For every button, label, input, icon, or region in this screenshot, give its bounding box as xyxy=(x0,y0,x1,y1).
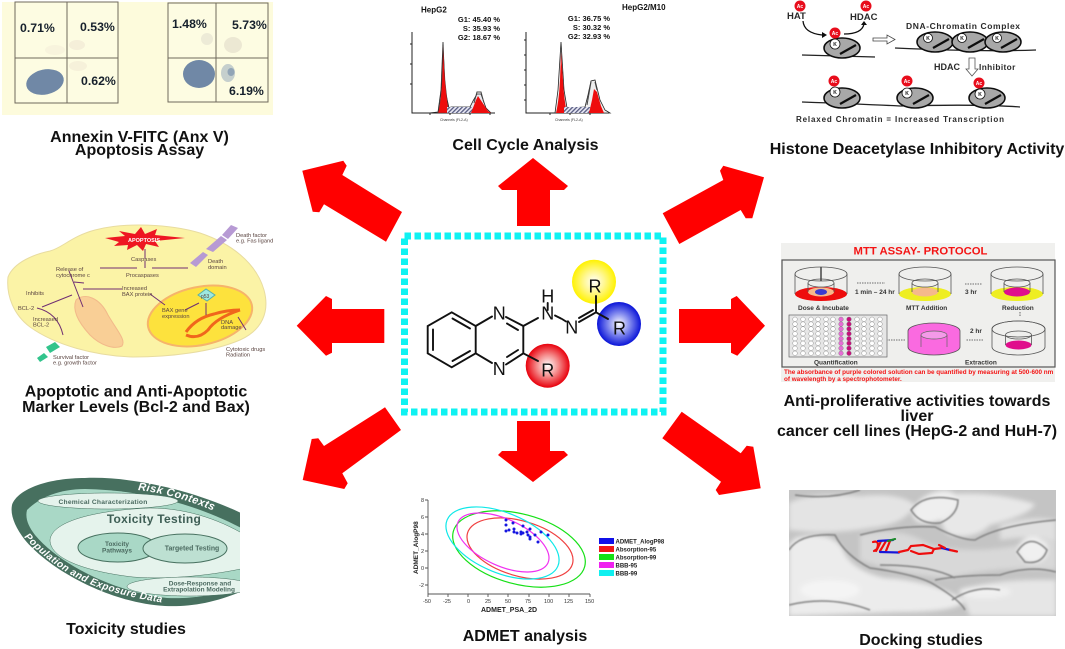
sample labels: HepG2 xyxy=(421,6,447,14)
legend: Absorption-99 xyxy=(616,556,657,562)
Ac and K marks: K xyxy=(833,42,837,48)
step labels: 1 min – 24 hr xyxy=(855,289,895,296)
step labels: Reduction xyxy=(1002,305,1034,312)
step labels: Quantification xyxy=(814,360,858,366)
chromatin diagram xyxy=(794,0,1036,108)
legend: ADMET_AlogP98 xyxy=(616,540,665,546)
substituent circle: blue xyxy=(597,302,641,346)
quadrant percentages xyxy=(20,17,267,98)
panel: MTT assay xyxy=(777,243,1057,440)
quadrant percentages: 0.53% xyxy=(80,20,115,34)
axis ticks: 150 xyxy=(585,599,594,605)
channel axis labels: Channels (FL2-A) xyxy=(440,118,468,122)
pathway labels: Increased xyxy=(122,286,147,292)
heading: cell cycle: Cell Cycle Analysis xyxy=(452,137,599,154)
diagram labels xyxy=(787,11,1021,124)
heading: Annexin: Annexin V-FITC (Anx V) xyxy=(50,129,229,146)
cycle percentages: S: 35.93 % xyxy=(463,24,500,33)
axis ticks: 75 xyxy=(525,599,531,605)
cycle percentages: G2: 32.93 % xyxy=(568,32,610,41)
cycle percentages xyxy=(458,14,610,42)
axis ticks: 2 xyxy=(421,549,424,555)
protocol title: MTT ASSAY- PROTOCOL xyxy=(854,246,988,258)
docked ligand xyxy=(873,539,957,554)
axis ticks: -50 xyxy=(423,599,431,605)
heading: histone: Histone Deacetylase Inhibitory Activity xyxy=(770,141,1064,158)
quadrant percentages: 5.73% xyxy=(232,18,267,32)
Ac and K marks: K xyxy=(905,91,909,97)
biplot xyxy=(425,492,594,600)
axis ticks: 125 xyxy=(564,599,573,605)
diagram labels: HDAC xyxy=(850,12,878,23)
pathway labels: BAX gene xyxy=(162,308,188,314)
atom labels: R xyxy=(613,318,626,338)
protocol diagram xyxy=(782,260,1055,367)
protein surface xyxy=(789,484,1056,616)
panel: Annexin V apoptosis assay xyxy=(2,2,273,159)
diagram labels: HAT xyxy=(787,11,806,22)
cycle percentages: G1: 36.75 % xyxy=(568,14,610,23)
pathway labels: Increased xyxy=(33,317,58,323)
atom labels: H xyxy=(541,286,554,306)
red arrow: bottom right xyxy=(662,412,761,495)
Ac and K marks: K xyxy=(926,36,930,42)
pathway labels: Inhibits xyxy=(26,291,44,297)
panel: apoptotic markers xyxy=(8,225,273,416)
atom labels: N xyxy=(493,304,506,324)
pathway labels: BCL-2 xyxy=(18,306,34,312)
axis ticks: 8 xyxy=(421,498,424,504)
axis ticks: -25 xyxy=(443,599,451,605)
heading: ADMET: ADMET analysis xyxy=(463,628,587,645)
pathway labels: Death factor xyxy=(236,233,267,239)
atom labels: N xyxy=(565,318,578,338)
Ac and K marks: Ac xyxy=(904,79,910,85)
atom labels xyxy=(493,276,626,380)
heading: apoptotic markers: Apoptotic and Anti-Apoptotic xyxy=(25,384,247,400)
Ac and K marks xyxy=(797,4,999,98)
atom labels: R xyxy=(588,276,602,296)
diagram labels: DNA-Chromatin Complex xyxy=(906,21,1021,31)
step labels: 3 hr xyxy=(965,289,977,296)
pathway labels: expression xyxy=(162,314,190,320)
axis labels xyxy=(413,521,537,614)
quadrant percentages: 0.62% xyxy=(81,74,116,88)
sample labels: HepG2/M10 xyxy=(622,3,666,12)
ellipse labels: Toxicity xyxy=(105,541,129,548)
curved ring labels: Risk Contexts xyxy=(138,482,214,510)
red arrow: right xyxy=(679,296,765,356)
atom labels: N xyxy=(541,304,554,324)
diagram labels: Relaxed Chromatin = Increased Transcription xyxy=(796,115,1005,124)
pathway labels: Release of xyxy=(56,267,84,273)
pathway labels: Survival factor xyxy=(53,355,89,361)
pathway labels: Cytotoxic drugs xyxy=(226,347,265,353)
substituent circle: yellow xyxy=(572,260,616,304)
absorbance note: The absorbance of purple colored solution can be quantified by measuring at 500-600 nm xyxy=(784,369,1054,376)
quadrant percentages: 1.48% xyxy=(172,17,207,31)
axis ticks: 100 xyxy=(544,599,553,605)
pathway labels xyxy=(18,233,273,366)
quinoxaline hydrazone bonds xyxy=(428,296,608,367)
pathway labels: BAX protein xyxy=(122,292,152,298)
red arrow: left xyxy=(297,296,384,356)
pathway labels: DNA xyxy=(221,320,233,326)
pathway labels: Radiation xyxy=(226,352,250,358)
heading: Annexin: Apoptosis Assay xyxy=(75,142,204,159)
ellipse labels xyxy=(58,499,235,594)
panel: cell cycle analysis xyxy=(410,3,666,154)
Ac and K marks: Ac xyxy=(831,79,837,85)
Ac and K marks: Ac xyxy=(832,31,838,37)
ellipse labels: Pathways xyxy=(102,548,132,554)
pathway labels: e.g. growth factor xyxy=(53,360,97,366)
pathway labels: APOPTOSIS xyxy=(128,238,160,244)
pathway labels: BCL-2 xyxy=(33,322,49,328)
step labels: Extraction xyxy=(965,360,997,366)
heading: anti-proliferative: cancer cell lines (HepG-2 and HuH-7) xyxy=(777,423,1057,440)
channel axis labels: Channels (FL2-A) xyxy=(555,118,583,122)
pathway labels: e.g. Fas ligand xyxy=(236,238,273,244)
panel: central compound xyxy=(404,236,663,412)
legend: BBB-95 xyxy=(616,564,638,570)
pathway labels: Procaspases xyxy=(126,273,159,279)
pathway labels: cytochrome c xyxy=(56,273,90,279)
pathway labels: Caspases xyxy=(131,257,156,263)
atom labels: R xyxy=(541,360,554,380)
axis ticks: 50 xyxy=(505,599,511,605)
axis ticks: 0 xyxy=(467,599,470,605)
protocol card xyxy=(781,243,1055,382)
quadrant percentages: 0.71% xyxy=(20,21,55,35)
pathway labels: Death xyxy=(208,259,223,265)
quadrant percentages: 6.19% xyxy=(229,84,264,98)
diagram labels: HDAC xyxy=(934,62,960,72)
panel: histone deacetylase xyxy=(770,0,1064,158)
pathway labels: p53 xyxy=(201,294,210,300)
curved ring labels xyxy=(24,482,214,602)
ellipse labels: Chemical Characterization xyxy=(58,499,148,506)
Ac and K marks: Ac xyxy=(976,81,982,87)
axis ticks: 0 xyxy=(421,566,424,572)
ellipse labels: Targeted Testing xyxy=(165,546,219,552)
Ac and K marks: K xyxy=(995,36,999,42)
heading: toxicity: Toxicity studies xyxy=(66,621,186,638)
histograms xyxy=(410,32,610,115)
step labels: 2 hr xyxy=(970,328,982,335)
nested ellipse diagram xyxy=(12,478,253,606)
axis ticks: 6 xyxy=(421,515,424,521)
legend: BBB-99 xyxy=(616,572,638,578)
axis labels: ADMET_PSA_2D xyxy=(481,607,537,614)
diagram labels: Inhibitor xyxy=(979,62,1016,72)
Ac and K marks: K xyxy=(978,92,982,98)
red arrow: bottom xyxy=(498,421,568,482)
pathway labels: domain xyxy=(208,265,227,271)
axis ticks: 25 xyxy=(485,599,491,605)
Ac and K marks: Ac xyxy=(863,4,869,10)
panel: docking studies xyxy=(789,484,1056,649)
curved ring labels: Population and Exposure Data xyxy=(24,533,162,602)
red arrow: top right xyxy=(663,166,764,244)
cell pathway diagram xyxy=(8,225,266,362)
step labels xyxy=(798,289,1034,366)
flow cytometry plots xyxy=(2,2,273,115)
legend: Absorption-95 xyxy=(616,548,657,554)
sample labels xyxy=(421,3,666,14)
heading: anti-proliferative: Anti-proliferative activities towards xyxy=(784,393,1050,410)
Ac and K marks: K xyxy=(833,90,837,96)
red arrow: top xyxy=(498,158,568,226)
red arrow: top left xyxy=(302,161,402,242)
axis ticks: 4 xyxy=(421,532,424,538)
ellipse labels: Toxicity Testing xyxy=(107,512,201,526)
absorbance note: of wavelength by a spectrophotometer. xyxy=(784,376,902,383)
panel: toxicity studies xyxy=(12,478,240,638)
dashed cyan frame xyxy=(404,236,663,412)
absorbance note xyxy=(784,369,1054,383)
atom labels: N xyxy=(493,359,506,379)
Ac and K marks: K xyxy=(960,36,964,42)
heading: docking: Docking studies xyxy=(859,632,983,649)
channel axis labels xyxy=(440,118,583,122)
red arrow: bottom left xyxy=(303,407,401,489)
cycle percentages: G1: 45.40 % xyxy=(458,15,500,24)
cycle percentages: S: 30.32 % xyxy=(573,23,610,32)
panel: ADMET analysis xyxy=(413,492,665,645)
axis ticks: -2 xyxy=(419,583,424,589)
heading: apoptotic markers: Marker Levels (Bcl-2 and Bax) xyxy=(22,399,250,416)
cycle percentages: G2: 18.67 % xyxy=(458,33,500,42)
axis ticks xyxy=(419,498,594,605)
ellipse labels: Extrapolation Modeling xyxy=(163,586,235,594)
heading: anti-proliferative: liver xyxy=(901,408,933,425)
Ac and K marks: Ac xyxy=(797,4,803,10)
step labels: Dose & Incubate xyxy=(798,305,849,312)
axis labels: ADMET_AlogP98 xyxy=(413,521,420,574)
step labels: MTT Addition xyxy=(906,305,947,312)
ellipse labels: Dose-Response and xyxy=(169,580,231,588)
pathway labels: damage xyxy=(221,325,242,331)
substituent circle: red xyxy=(526,344,570,388)
legend xyxy=(599,538,665,578)
